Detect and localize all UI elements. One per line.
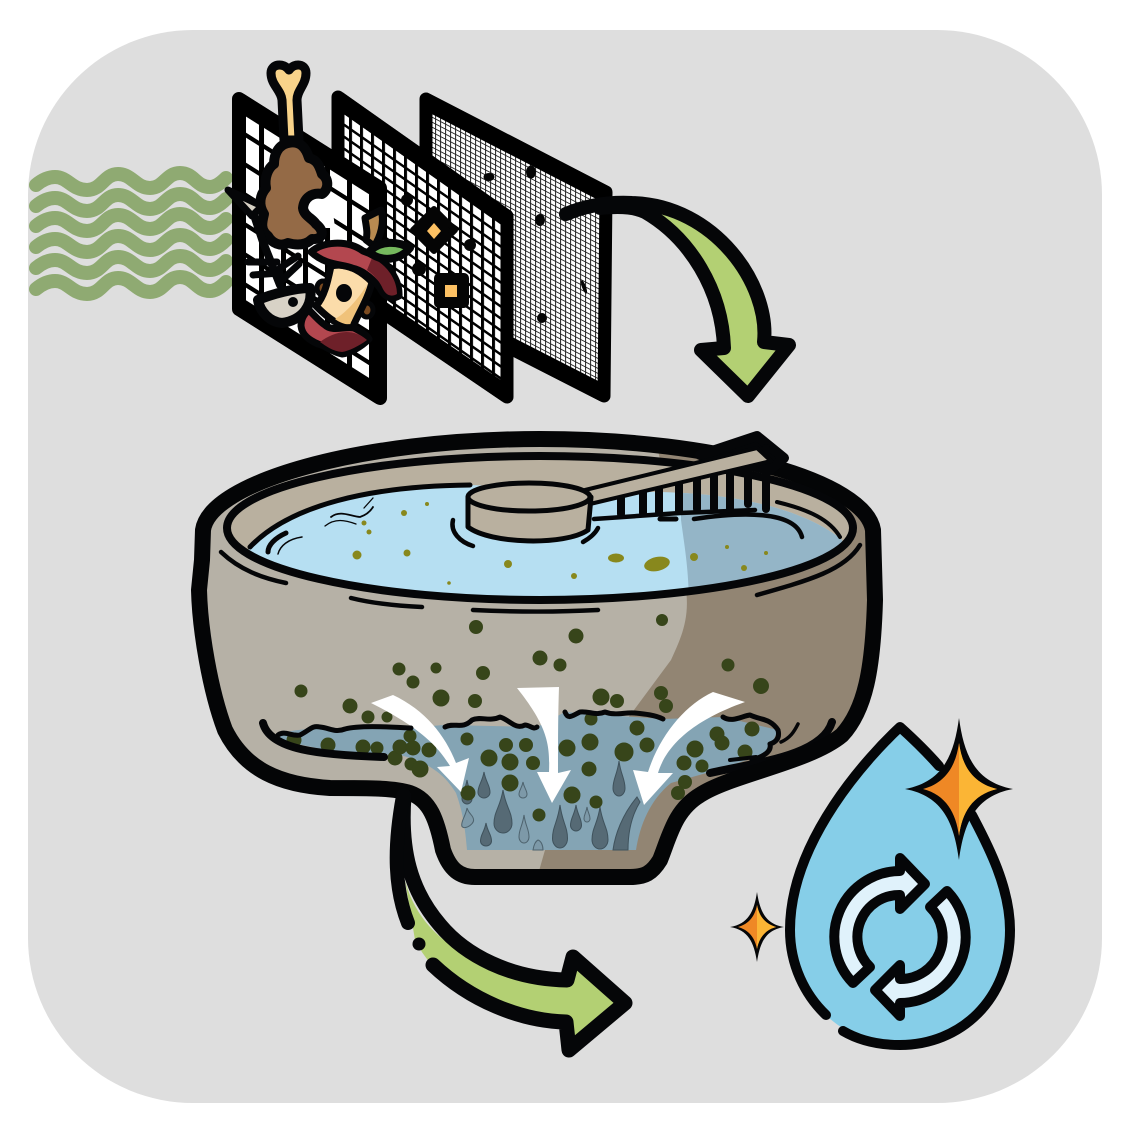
central clarifier disc [468, 483, 591, 541]
recycle arrow one [834, 858, 925, 983]
apple seed hole [336, 284, 352, 302]
tank outer outline [199, 439, 875, 877]
fish ribs [248, 256, 299, 280]
floating scum [352, 502, 768, 585]
drop outline [790, 727, 1010, 1045]
arrow outer edge [397, 796, 408, 923]
top green arrow from filters to tank [566, 203, 789, 396]
clean water drop with recycle icon [790, 727, 1010, 1045]
apple core [316, 265, 372, 326]
bite mark white patch [300, 188, 335, 228]
apple leaf [369, 243, 410, 259]
falling droplets dark [462, 761, 640, 850]
water ripples [268, 498, 840, 554]
fish eye [288, 297, 298, 307]
drop fill [790, 727, 1010, 1045]
rake teeth [621, 448, 766, 514]
apple bottom skin [301, 310, 369, 354]
fish head [258, 288, 311, 323]
fine mesh filter screen [426, 99, 606, 396]
tank body [199, 439, 875, 877]
sludge particles [287, 614, 768, 821]
water edge line [250, 485, 470, 547]
polluted water waves entering filters [36, 173, 226, 294]
apple stem [365, 210, 382, 246]
sludge surface wavy lines [278, 712, 779, 760]
trapped fine particles [484, 166, 588, 323]
medium mesh filter screen [338, 97, 507, 397]
rim interior [227, 456, 853, 600]
small sparkle [730, 892, 784, 962]
sludge water [278, 712, 778, 850]
drumstick bone [271, 65, 306, 140]
water surface [248, 485, 842, 596]
arrow dot [412, 938, 426, 950]
food waste on coarse screen [228, 65, 410, 354]
fish tail and spine [228, 190, 262, 216]
apple seeds [317, 281, 329, 295]
white settling arrows [371, 687, 745, 805]
rake end bracket [700, 436, 784, 470]
tank body shadow [540, 454, 867, 869]
recycle arrow two [875, 891, 966, 1016]
drumstick meat [260, 142, 327, 245]
rim ellipse [227, 456, 853, 600]
rake arm [585, 448, 771, 504]
large sparkle [905, 718, 1013, 860]
apple top skin [311, 243, 399, 298]
tank floor lines [263, 722, 832, 773]
sedimentation tank [199, 430, 900, 885]
bottom green arrow: clean water out [397, 796, 626, 1050]
coarse filter screen [239, 99, 380, 398]
tank body contour lines [221, 545, 860, 612]
trapped medium particles [401, 194, 476, 306]
falling droplets light [461, 782, 590, 850]
arrow head and upper edge [403, 796, 625, 1050]
